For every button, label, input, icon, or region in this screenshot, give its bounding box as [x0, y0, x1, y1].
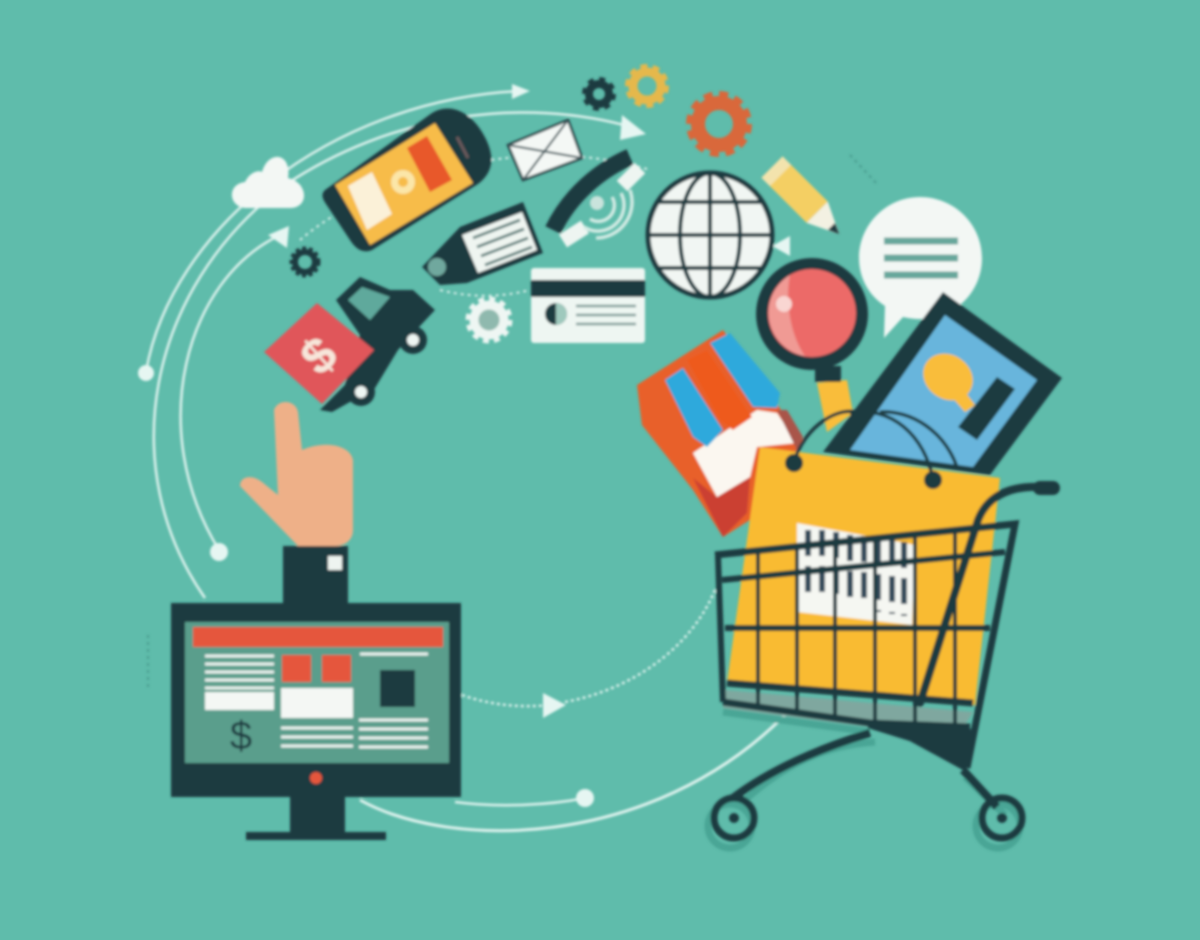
icon: cloud — [232, 157, 304, 208]
icon: small gear yellow — [627, 66, 667, 106]
icon: speech bubble — [859, 197, 982, 338]
icon: globe — [648, 173, 772, 297]
icon: smartphone — [322, 108, 491, 251]
icon: shopping cart — [708, 487, 1053, 848]
icon: storefront — [637, 330, 803, 537]
icon: credit card — [531, 268, 645, 343]
icon: pencil — [761, 156, 850, 245]
icon: envelope — [508, 120, 582, 180]
icon: hand pointing — [240, 402, 353, 608]
icon: computer monitor — [171, 603, 461, 840]
icon: computer monitor: $ — [230, 714, 252, 758]
icon: price tag — [422, 202, 543, 285]
icon: magnifying glass — [756, 258, 868, 432]
icon: small dark gear left — [291, 248, 319, 276]
icon: delivery truck with dollar box: $ — [290, 326, 348, 386]
flow arcs — [146, 91, 878, 831]
icon: shopping bag — [727, 411, 1000, 705]
icon: white gear — [468, 299, 510, 341]
icon: tablet — [823, 292, 1062, 475]
icon: small gear dark — [584, 79, 614, 109]
icon: gear orange — [689, 94, 749, 154]
icon: telephone handset — [553, 157, 640, 241]
icon: delivery truck with dollar box — [264, 277, 435, 412]
arc endpoints — [138, 84, 790, 807]
